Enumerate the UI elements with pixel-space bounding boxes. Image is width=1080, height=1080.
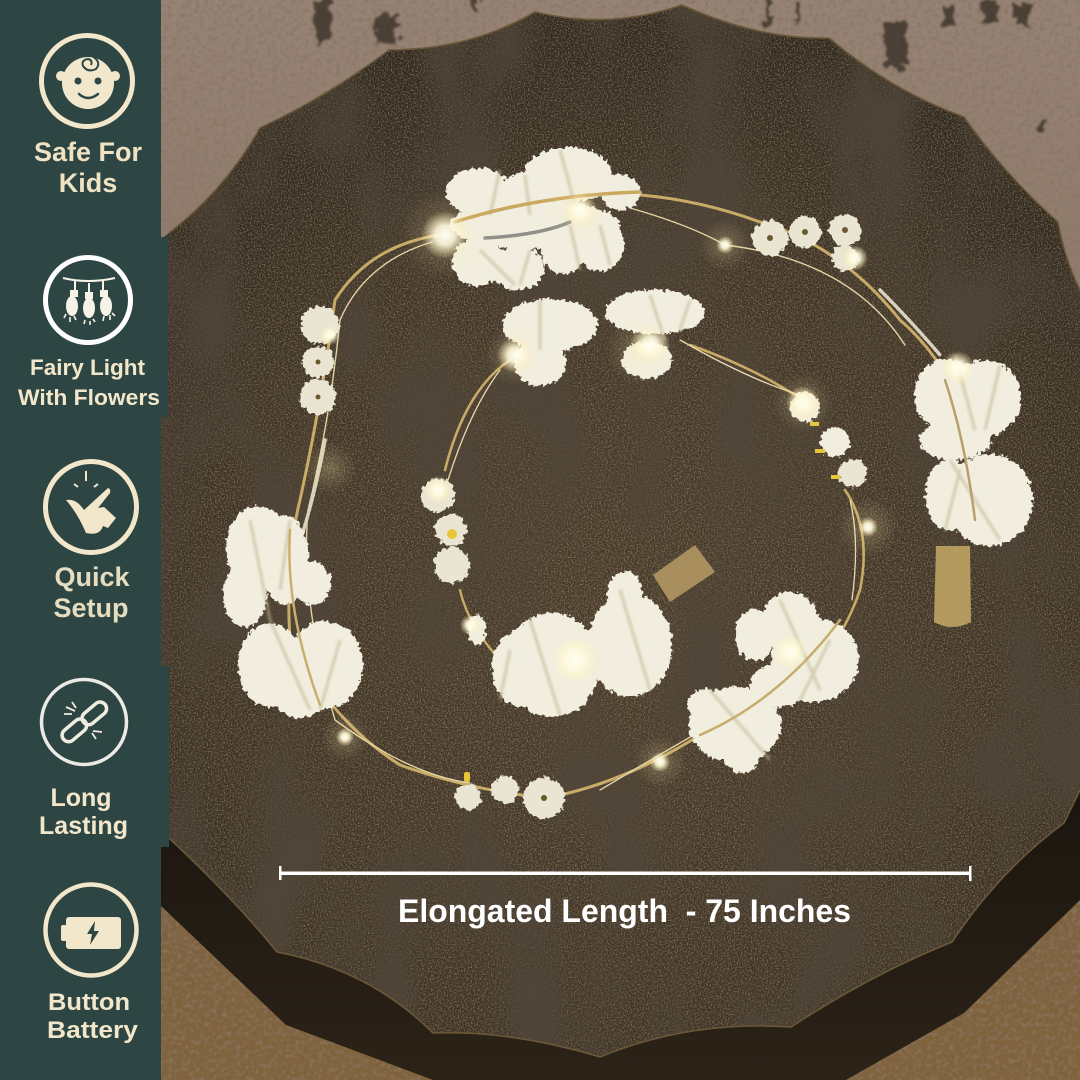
feature: quick setup: Setup	[53, 593, 129, 623]
icon: chain link	[59, 699, 109, 744]
flowers: inner right sprig	[468, 392, 850, 645]
label: Long	[50, 784, 112, 812]
cork stopper: outer	[934, 546, 971, 627]
daisies: inner left	[421, 459, 867, 583]
flowers: left large cluster	[223, 506, 363, 718]
flowers: bottom right cluster	[687, 592, 859, 773]
yellow flower centres	[447, 422, 840, 782]
sidebar	[0, 0, 169, 1080]
feature: long lasting	[39, 680, 128, 840]
flowers: inner top arc	[502, 290, 705, 386]
feature: button battery: Battery	[47, 1017, 139, 1044]
trim lower right	[700, 620, 840, 735]
length measure line	[279, 866, 972, 881]
inner wire strand	[445, 345, 864, 650]
table skirt	[160, 780, 1080, 1080]
fairy light glows	[304, 176, 975, 788]
petal shading	[250, 150, 1000, 760]
icon: battery	[61, 917, 121, 949]
label: Button	[48, 989, 130, 1016]
outer wire strand	[289, 195, 960, 798]
flowers: inner bottom cluster	[492, 571, 672, 717]
silver trim top	[485, 222, 570, 238]
icon: string lights	[63, 278, 115, 325]
rug stains	[315, 0, 1046, 130]
gold trim top	[455, 192, 640, 222]
feature: fairy light with flowers	[18, 258, 160, 410]
feature: quick setup	[46, 462, 136, 623]
flowers: right cluster	[914, 359, 1033, 546]
daisy centres	[316, 227, 848, 801]
cork stopper: inner	[653, 545, 715, 602]
feature: button battery	[46, 884, 139, 1044]
daisies: bottom	[455, 776, 565, 819]
flowers: top cluster	[446, 147, 640, 290]
daisies: left	[300, 306, 339, 415]
trim right cluster	[945, 380, 975, 520]
icon: snapping hand	[66, 471, 116, 534]
feature: fairy light with flowers: With Flowers	[18, 385, 160, 410]
daisies: top	[752, 214, 861, 271]
white sequin strip	[302, 290, 940, 535]
length caption: Elongated Length - 75 Inches	[398, 893, 851, 929]
label: Quick	[54, 562, 130, 592]
flowers	[223, 147, 1033, 819]
feature: safe for kids	[34, 36, 143, 198]
icon: baby face	[56, 56, 120, 109]
sequin trims	[289, 192, 975, 735]
label: Safe For	[34, 137, 143, 167]
feature: long lasting: Lasting	[39, 812, 128, 840]
fairy light wires	[289, 195, 960, 798]
feature: safe for kids: Kids	[59, 168, 117, 198]
trim left	[289, 530, 320, 705]
label: Fairy Light	[30, 355, 146, 380]
